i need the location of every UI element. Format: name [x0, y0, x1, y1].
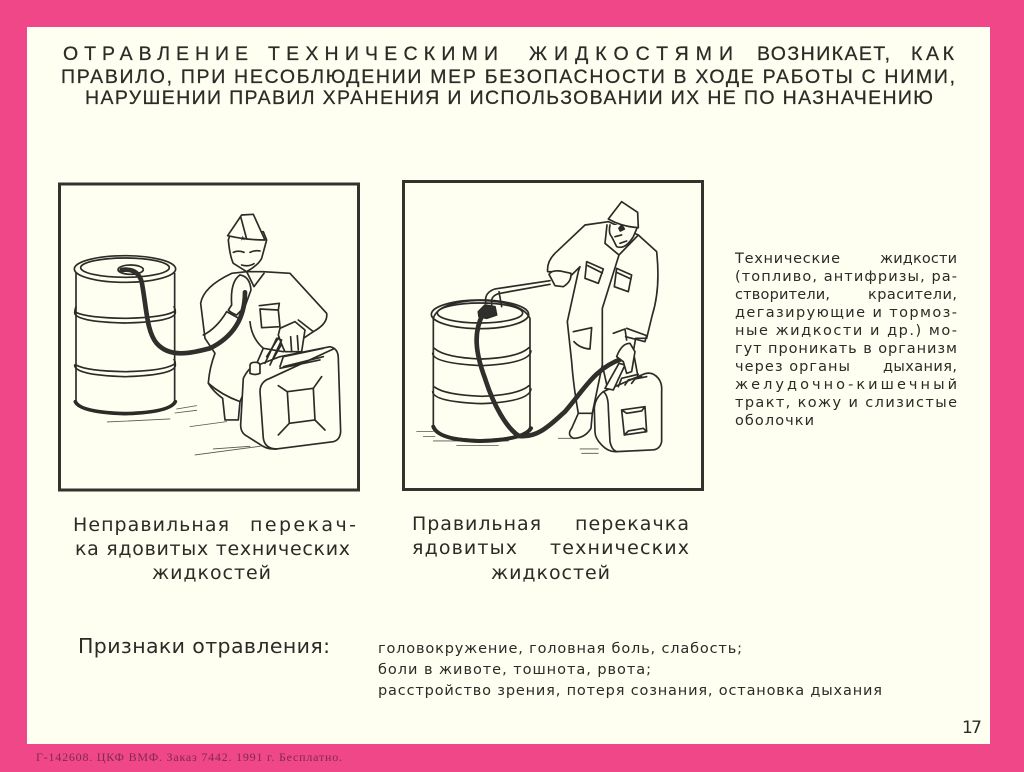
star on cap: [240, 236, 245, 241]
caption: correct pumping: перекачка: [575, 513, 689, 535]
caption: incorrect pumping: перекач-: [250, 514, 356, 536]
caption: incorrect pumping: ка ядовитых технических: [75, 538, 350, 560]
icon: barrel: [74, 256, 176, 414]
text block: technical fluids: тракт, кожу и слизистые: [735, 395, 957, 411]
text block: symptoms: расстройство зрения, потеря сознания, остановка дыхания: [378, 683, 882, 699]
title: ПРАВИЛО, ПРИ НЕСОБЛЮДЕНИИ МЕР БЕЗОПАСНОСТИ В ХОДЕ РАБОТЫ С НИМИ,: [61, 66, 955, 88]
text block: technical fluids: Технические: [734, 251, 840, 267]
footer imprint: Г-142608. ЦКФ ВМФ. Заказ 7442. 1991 г. Бесплатно.: [36, 750, 342, 764]
caption: correct pumping: [412, 513, 689, 584]
text block: technical fluids: (топливо, антифризы, ра-: [735, 269, 957, 285]
text block: technical fluids: красители,: [868, 287, 957, 303]
title: ТЕХНИЧЕСКИМИ: [268, 43, 498, 65]
illustration: soldier sucking hose from barrel: [74, 214, 341, 455]
panel: incorrect pumping illustration: [60, 184, 358, 490]
text block: technical fluids: ные жидкости и др.) мо-: [735, 323, 957, 339]
illustration: soldier using pump handle: [417, 202, 662, 453]
text block: symptoms: [378, 641, 882, 699]
text block: technical fluids: оболочки: [735, 413, 814, 429]
title: НАРУШЕНИИ ПРАВИЛ ХРАНЕНИЯ И ИСПОЛЬЗОВАНИИ ИХ НЕ ПО НАЗНАЧЕНИЮ: [85, 87, 933, 109]
picture frame: [60, 184, 358, 490]
soldier in coveralls: [548, 202, 658, 438]
text block: technical fluids: дегазирующие и тормоз-: [735, 305, 957, 321]
caption: correct pumping: Правильная: [412, 513, 541, 535]
hose: [477, 313, 622, 436]
text block: technical fluids: жидкости: [880, 251, 957, 267]
text block: technical fluids: через органы: [735, 359, 850, 375]
text block: technical fluids: гут проникать в организм: [735, 341, 957, 357]
text block: technical fluids: [734, 251, 957, 429]
caption: correct pumping: технических: [550, 537, 689, 559]
icon: jerrycan: [241, 338, 341, 449]
caption: incorrect pumping: Неправильная: [73, 514, 229, 536]
title: [61, 43, 955, 109]
hand on can: [617, 343, 635, 373]
caption: correct pumping: жидкостей: [491, 562, 610, 584]
picture frame: [404, 182, 702, 490]
heading: signs of poisoning: Признаки отравления:: [78, 634, 330, 658]
ground strokes: [417, 432, 598, 453]
hose: [122, 270, 245, 353]
caption: incorrect pumping: [73, 514, 356, 584]
caption: incorrect pumping: жидкостей: [152, 562, 271, 584]
text block: technical fluids: дыхания,: [883, 359, 957, 375]
text block: technical fluids: желудочно-кишечный: [735, 377, 957, 393]
text block: symptoms: боли в животе, тошнота, рвота;: [378, 662, 651, 678]
text block: symptoms: головокружение, головная боль, слабость;: [378, 641, 742, 657]
caption: correct pumping: ядовитых: [412, 537, 517, 559]
icon: pump handle: [478, 281, 550, 318]
page number: 17: [962, 718, 982, 738]
ground strokes: [107, 406, 260, 455]
panel: correct pumping illustration: [404, 182, 702, 490]
text block: technical fluids: створители,: [735, 287, 830, 303]
title: ВОЗНИКАЕТ,: [757, 43, 890, 65]
title: ОТРАВЛЕНИЕ: [63, 43, 248, 65]
title: КАК: [911, 43, 955, 65]
title: ЖИДКОСТЯМИ: [529, 43, 733, 65]
icon: barrel: [431, 300, 531, 441]
icon: jerrycan: [594, 363, 662, 452]
soldier: [201, 214, 327, 420]
